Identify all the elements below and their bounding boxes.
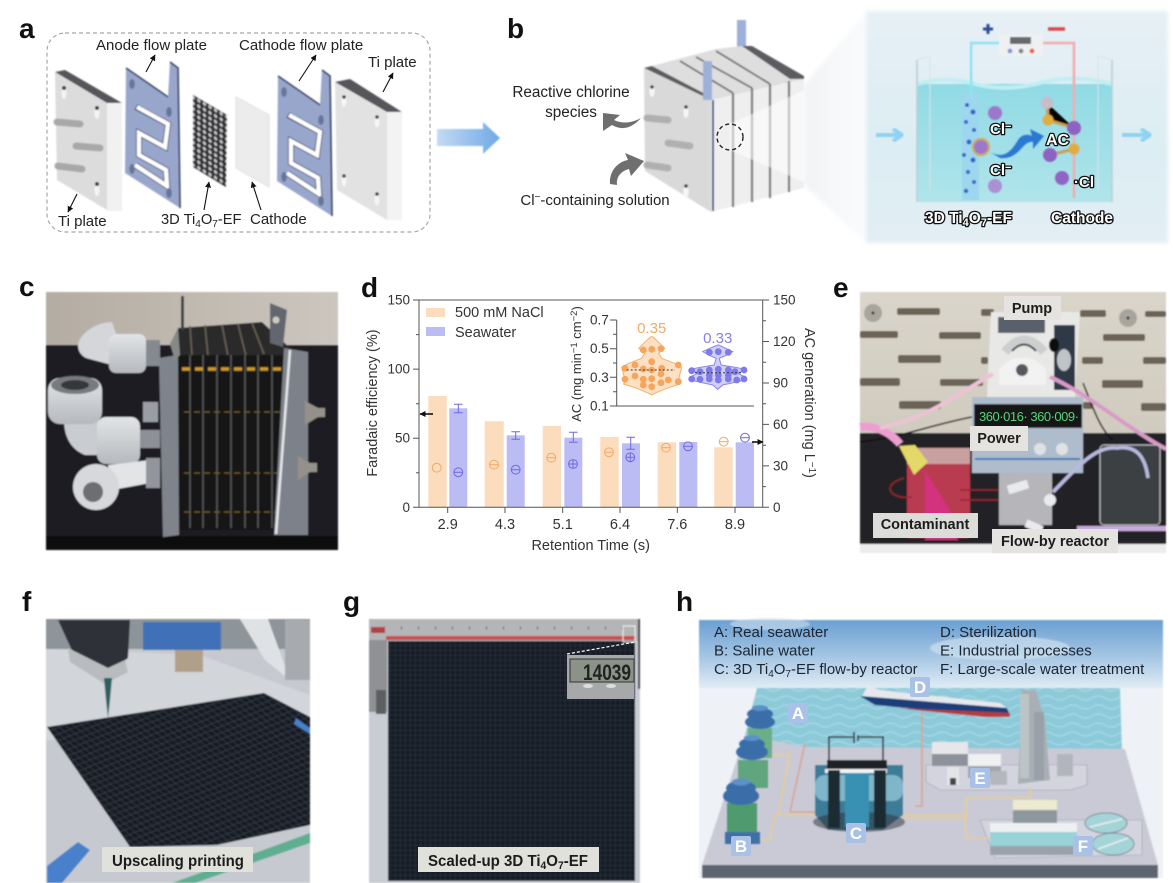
inset axes (610, 320, 754, 406)
left-pointing axis arrow (420, 413, 433, 415)
panel b: assembled stack and reaction cell (507, 11, 1168, 243)
right y-axis tick labels: 0 (773, 500, 781, 515)
right-pointing axis arrow (752, 441, 763, 443)
inset tick labels: 0.3 (590, 370, 609, 385)
photo (860, 292, 1166, 553)
electrode label: 7 (212, 219, 218, 230)
right y-axis title: −1 (806, 462, 817, 474)
right y-axis tick labels (773, 292, 796, 515)
electrode label: 4 (195, 219, 201, 230)
key D: D: Sterilization (940, 624, 1037, 641)
label a: a (19, 13, 35, 44)
cathode label: Cathode (250, 211, 307, 228)
inset violin plot (569, 306, 754, 422)
AC generation markers blue (454, 433, 749, 477)
inset tick labels: 0.7 (590, 312, 609, 328)
x-axis tick labels: 8.9 (725, 517, 745, 533)
marker A: A (792, 704, 804, 723)
AC generation markers orange (432, 437, 728, 472)
anode flow plate (125, 62, 180, 208)
photo (46, 619, 310, 883)
flow-by reactor label (992, 529, 1118, 553)
contaminant label: Contaminant (881, 517, 969, 533)
panel a: exploded reactor assembly (19, 13, 430, 232)
pump label: Pump (1012, 301, 1052, 317)
median line: NaCl (627, 369, 675, 371)
flow-by reactor label: Flow-by reactor (1001, 534, 1109, 550)
right y-axis tick labels: 60 (773, 417, 788, 432)
error bars (454, 404, 635, 449)
assembled stack (644, 20, 804, 212)
marker D: D (914, 678, 926, 697)
x-axis tick labels: 4.3 (495, 517, 515, 533)
panel g: scaled-up electrode photograph (343, 586, 640, 883)
inset y-axis title: ) (569, 306, 584, 311)
violin dots: NaCl (622, 345, 682, 390)
chloride label lower: − (1005, 162, 1011, 174)
marker C (846, 823, 866, 843)
label g: g (343, 586, 360, 617)
chloride label upper: − (1005, 121, 1011, 133)
cathode sheet (236, 97, 269, 187)
bars 500 mM NaCl (428, 396, 733, 507)
x-axis title: Retention Time (s) (531, 538, 650, 554)
chloride label upper: Cl (990, 121, 1005, 138)
dashed zoom circle (717, 124, 743, 150)
right Ti plate label: Ti plate (368, 54, 417, 71)
marker F: F (1078, 837, 1088, 856)
label d: d (361, 272, 378, 303)
inset tick labels: 0.1 (590, 398, 609, 414)
cathode flow plate (277, 70, 332, 216)
key C: -EF flow-by reactor (791, 661, 918, 678)
panel d: Faradaic efficiency chart (361, 272, 817, 554)
right Ti plate (335, 79, 402, 220)
x-axis tick labels: 6.4 (610, 517, 630, 533)
power label (970, 426, 1028, 451)
arrow: assembly to stack (437, 122, 500, 154)
label f: f (22, 586, 32, 617)
key E: E: Industrial processes (940, 642, 1092, 660)
solution label: − (535, 192, 541, 203)
left Ti plate (55, 70, 122, 211)
left y-axis tick labels (387, 292, 410, 515)
solution label: Cl (520, 192, 535, 209)
chlorine radical label: ·Cl (1074, 174, 1094, 191)
key F: F: Large-scale water treatment (940, 661, 1145, 678)
right y-axis tick labels: 150 (773, 292, 796, 308)
reading on power supply: 360·016· 360·009· (979, 409, 1079, 424)
value 0.33: 0.33 (703, 330, 732, 347)
inset tick labels (590, 312, 609, 414)
inlet arrow (876, 129, 902, 141)
left y-axis tick labels: 100 (387, 362, 410, 376)
left y-axis tick labels: 150 (387, 292, 410, 308)
marker E: E (974, 769, 986, 788)
bio-filter tanks (723, 705, 775, 844)
caption: O (546, 853, 558, 870)
caption (418, 847, 599, 872)
x-axis tick labels: 5.1 (553, 517, 573, 533)
electrode label: O (969, 210, 981, 227)
violin: NaCl (622, 337, 682, 395)
zoom beam (804, 12, 866, 243)
power supply (983, 24, 1065, 56)
violin: seawater (690, 345, 746, 389)
cathode flow plate label: Cathode flow plate (239, 37, 363, 54)
label c: c (19, 271, 35, 302)
electrode label: 3D Ti (161, 212, 195, 228)
left Ti plate label: Ti plate (58, 213, 107, 230)
electrode label: -EF (987, 210, 1012, 227)
panel h: application scenario (676, 586, 1163, 878)
panel f: upscaling printing photograph (22, 586, 310, 883)
legend: Seawater (455, 325, 516, 341)
caption: -EF (564, 853, 588, 870)
solution label: -containing solution (540, 192, 670, 209)
label b: b (507, 13, 524, 44)
median line: seawater (695, 372, 742, 374)
caliper reading: 14039 (583, 660, 631, 685)
AC label: AC (1046, 132, 1070, 149)
right y-axis tick labels: 30 (773, 458, 788, 474)
inset y-axis title: cm (569, 321, 584, 342)
marker A (788, 703, 808, 723)
contaminant label (873, 513, 978, 538)
key C: 4 (768, 669, 774, 680)
caption: 4 (541, 860, 547, 872)
photo (46, 292, 338, 550)
panel c: reactor photograph (19, 271, 338, 550)
marker B (731, 836, 751, 856)
caption: Scaled-up 3D Ti (428, 853, 548, 870)
label e: e (833, 272, 849, 303)
marker E (970, 768, 990, 788)
legend (426, 305, 544, 341)
electron flow arrow (990, 129, 1044, 158)
marker D (910, 677, 930, 697)
callout arrows (68, 55, 393, 212)
species label: species (545, 104, 597, 121)
caption: 7 (558, 860, 564, 872)
photo (369, 619, 640, 883)
electrode label: -EF (218, 212, 242, 228)
bars seawater (449, 408, 754, 507)
chloride label lower: Cl (990, 162, 1005, 179)
dashed frame (47, 33, 430, 232)
gray outflow arrow (603, 113, 641, 131)
cathode label: Cathode (1051, 210, 1113, 227)
molecules (973, 97, 1081, 193)
caption: Upscaling printing (112, 853, 244, 870)
power label: Power (977, 431, 1021, 447)
right y-axis title: ) (801, 473, 817, 478)
electrode label: 4 (963, 217, 970, 229)
left y-axis title: Faradaic efficiency (%) (365, 329, 381, 477)
key C: C: 3D Ti (714, 661, 768, 678)
x-axis tick labels: 2.9 (438, 517, 458, 533)
anode flow plate label: Anode flow plate (96, 37, 207, 54)
left y-axis tick labels: 50 (395, 430, 410, 446)
key B: B: Saline water (714, 642, 815, 660)
magnified caliper readout (567, 642, 635, 699)
electrode label: O (201, 212, 212, 228)
right y-axis tick labels: 90 (773, 376, 788, 390)
electrode label: 7 (981, 217, 987, 229)
left y-axis tick labels: 0 (402, 500, 410, 515)
outlet arrow (1122, 129, 1150, 141)
legend: 500 mM NaCl (455, 305, 544, 321)
key C: 7 (785, 669, 791, 680)
key A: A: Real seawater (714, 624, 828, 641)
right y-axis tick labels: 120 (773, 334, 796, 349)
inset y-axis title: −2 (569, 311, 580, 321)
x-axis tick labels (438, 517, 745, 533)
key C: O (774, 661, 785, 678)
reaction cell illustration (866, 11, 1168, 243)
3D Ti4O7 electrode mesh (193, 95, 227, 187)
violin dots: seawater (688, 348, 747, 383)
inset y-axis title: AC (mg min (569, 353, 584, 422)
caption (102, 847, 253, 872)
cell background (866, 11, 1168, 243)
inset tick labels: 0.5 (590, 341, 609, 356)
marker F (1073, 836, 1093, 856)
panel e: experimental setup photograph (833, 272, 1166, 553)
label h: h (676, 586, 693, 617)
x-axis tick labels: 7.6 (667, 517, 687, 533)
electrode (962, 93, 979, 200)
inset y-axis title: −1 (569, 342, 580, 353)
scene (699, 618, 1163, 878)
glass tank and water (917, 56, 1112, 202)
reactive chlorine label: Reactive chlorine (512, 84, 630, 101)
wires (971, 43, 1000, 98)
value 0.35: 0.35 (637, 320, 666, 337)
right y-axis title: AC generation (mg L (801, 328, 817, 462)
marker C: C (850, 824, 862, 843)
pump label (1004, 296, 1061, 320)
marker B: B (735, 837, 747, 856)
electrode label: 3D Ti (925, 210, 963, 227)
axes and ticks (413, 300, 769, 513)
gray inflow arrow (610, 153, 644, 185)
